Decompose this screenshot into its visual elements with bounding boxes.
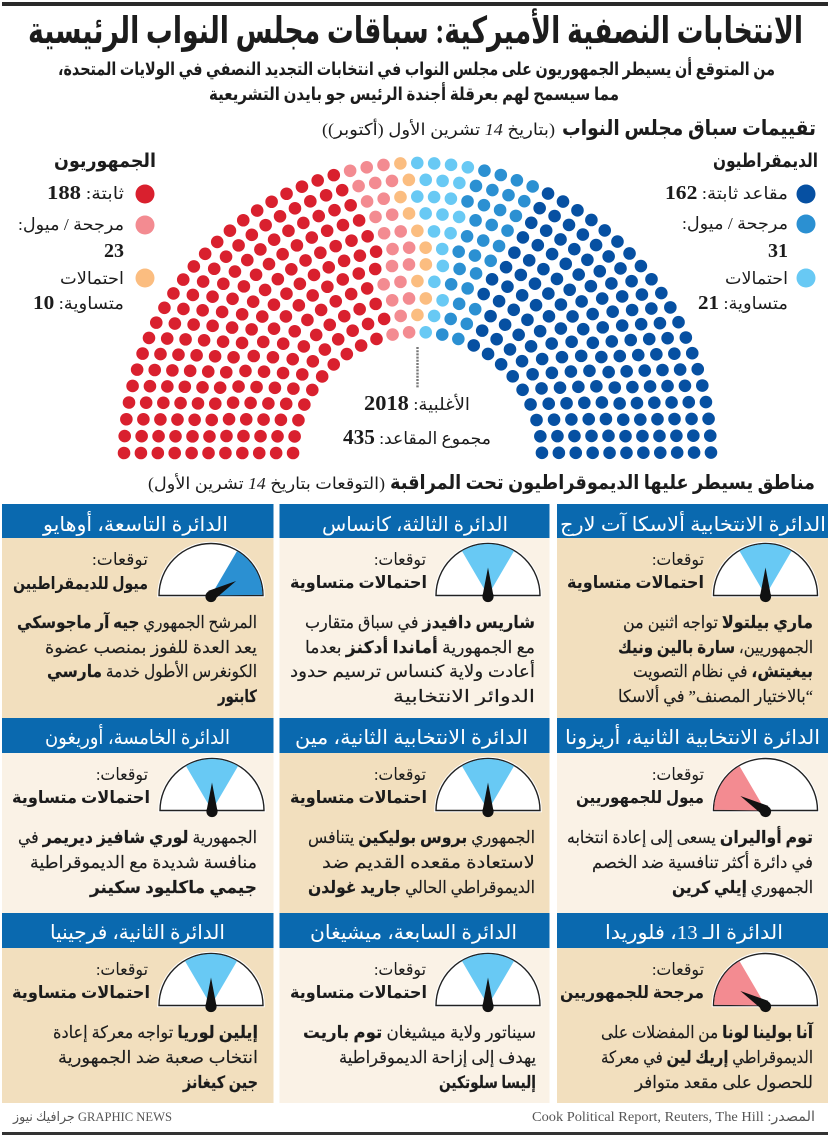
- panel: Oregon: احتمالات متساوية: [12, 788, 150, 808]
- panel: Kansas: احتمالات متساوية: [290, 573, 427, 593]
- heading: House race ratings: [322, 116, 816, 140]
- panel: Alaska: “بالاختيار المصنف” في ألاسكا: [618, 685, 813, 707]
- gauge: even: [714, 544, 818, 602]
- legend: Democrats: مرجحة / ميول:: [682, 214, 788, 233]
- panel: Michigan: الدائرة السابعة، ميشيغان: [310, 922, 517, 944]
- panel: Florida: مرجحة للجمهوريين: [560, 983, 704, 1003]
- panel: Arizona: توم أواليران يسعى إلى إعادة انتخابه: [567, 826, 813, 848]
- panel: Virginia: جين كيغانز: [182, 1073, 258, 1093]
- panel: Michigan: توقعات:: [374, 960, 426, 979]
- panel: Michigan: سيناتور ولاية ميشيغان توم باريت: [303, 1023, 536, 1043]
- panel: Oregon: منافسة شديدة مع الديموقراطية: [30, 853, 257, 873]
- panel: Maine: الديموقراطي الحالي جاريد غولدن: [308, 878, 535, 898]
- footer: credit: GRAPHIC NEWS جرافيك نيوز: [12, 1109, 172, 1125]
- panel: Alaska: ماري بيلتولا تواجه اثنين من: [623, 613, 813, 633]
- legend: Republicans: ثابتة: 188: [47, 182, 124, 204]
- panel: Ohio: توقعات:: [92, 550, 148, 569]
- panel: Virginia: توقعات:: [96, 960, 148, 979]
- footer: source: المصدر: Cook Political Report, Reuters, The Hill: [532, 1110, 815, 1125]
- majority and total seats labels: مجموع المقاعد: 435: [343, 425, 491, 449]
- panel: Oregon: الجمهورية لوري شافيز ديريمر في: [18, 828, 257, 848]
- gauge: even: [159, 954, 263, 1012]
- majority and total seats labels: [343, 391, 491, 449]
- panel: Ohio: الكونغرس الأطول خدمة مارسي: [47, 661, 257, 682]
- panel: Maine: توقعات:: [374, 765, 426, 784]
- panel: Kansas: شاريس دافيدز في سباق متقارب: [305, 613, 535, 633]
- panel: Florida: [557, 913, 828, 1103]
- subtitle: مما سيسمح لهم بعرقلة أجندة الرئيس جو بايدن التشريعية: [209, 82, 619, 105]
- legend: Democrats: احتمالات: [725, 269, 788, 288]
- majority and total seats labels: الأغلبية: 2018: [364, 391, 470, 415]
- gauge: even: [436, 954, 540, 1012]
- panel: Kansas: توقعات:: [374, 550, 426, 569]
- panel: Ohio: كابتور: [217, 687, 257, 707]
- legend: Republicans: احتمالات: [60, 269, 124, 288]
- panel: Arizona: الدائرة الانتخابية الثانية، أريزونا: [565, 724, 820, 749]
- panel: Virginia: الدائرة الثانية، فرجينيا: [50, 922, 225, 944]
- legend: Democrats: متساوية: 21: [698, 292, 788, 314]
- panel: Michigan: احتمالات متساوية: [290, 983, 427, 1003]
- gauge: likely Republican: [714, 954, 818, 1012]
- panel: Kansas: [280, 504, 550, 718]
- panel: Ohio: [2, 504, 274, 718]
- panel: Maine: [280, 718, 550, 913]
- panel: Oregon: الدائرة الخامسة، أوريغون: [45, 724, 230, 749]
- panel: Alaska: الدائرة الانتخابية ألاسكا آت لارج: [560, 511, 826, 536]
- panel: Oregon: جيمي ماكليود سكينر: [89, 878, 257, 898]
- panel: Virginia: انتخاب صعبة ضد الجمهورية: [58, 1048, 258, 1068]
- panel: Virginia: احتمالات متساوية: [12, 983, 150, 1003]
- panel: Florida: للحصول على مقعد متوافر: [634, 1073, 813, 1092]
- panel: Florida: الدائرة الـ 13، فلوريدا: [605, 922, 783, 944]
- panel: Maine: الجمهوري بروس بوليكين يتنافس: [308, 828, 535, 848]
- legend: Democrats: مقاعد ثابتة: 162: [665, 182, 788, 204]
- panel: Michigan: [280, 913, 550, 1103]
- panel: Arizona: ميول للجمهوريين: [576, 788, 704, 808]
- panel: Alaska: توقعات:: [652, 550, 704, 569]
- panel: Michigan: إليسا سلوتكين: [439, 1073, 536, 1093]
- panel: Maine: لاستعادة مقعده القديم ضد: [322, 853, 535, 873]
- panel: Oregon: [2, 718, 274, 913]
- panel: Maine: الدائرة الانتخابية الثانية، مين: [295, 727, 528, 749]
- panel: Alaska: احتمالات متساوية: [567, 573, 704, 593]
- panel: Kansas: الدائرة الثالثة، كانساس: [322, 514, 508, 536]
- panel: Kansas: الدوائر الانتخابية: [393, 687, 535, 706]
- panel: Arizona: [557, 718, 828, 913]
- legend: Republicans: مرجحة / ميول:: [18, 215, 124, 234]
- gauge: even: [436, 758, 540, 817]
- legend: Republicans: 23: [104, 240, 124, 262]
- gauge: even: [436, 544, 540, 602]
- legend: Republicans: الجمهوريون: [54, 151, 156, 172]
- gauge: lean Republican: [714, 758, 818, 817]
- panel: Virginia: [2, 913, 274, 1103]
- panel: Alaska: [557, 504, 828, 718]
- legend: Democrats: 31: [768, 240, 788, 262]
- chart: House seats hemicycle, 435 dots: [124, 163, 711, 453]
- panel: Ohio: المرشح الجمهوري جيه آر ماجوسكي: [17, 611, 257, 633]
- legend: Republicans: [18, 151, 156, 314]
- heading: House race ratings: (بتاريخ 14 تشرين الأول (أكتوبر)): [322, 118, 555, 140]
- panel: Alaska: بيغيتش، في نظام التصويت: [633, 662, 813, 682]
- heading: Democrat-held districts to watch: [148, 472, 815, 494]
- heading: Democrat-held districts to watch: (التوقعات بتاريخ 14 تشرين الأول): [148, 473, 385, 494]
- legend: Democrats: [665, 151, 818, 314]
- panel: Kansas: أعادت ولاية كنساس ترسيم حدود: [290, 660, 535, 682]
- legend: Republicans: متساوية: 10: [33, 292, 124, 314]
- panel: Arizona: في دائرة أكثر تنافسية ضد الخصم: [592, 851, 813, 873]
- panel: Oregon: توقعات:: [96, 765, 148, 784]
- panel: Virginia: إيلين لوريا تواجه معركة إعادة: [53, 1023, 258, 1043]
- panel: Arizona: توقعات:: [652, 765, 704, 784]
- majority marker line: [416, 347, 419, 388]
- gauge: even: [160, 758, 264, 817]
- panel: Florida: الديموقراطي إريك لين في معركة: [601, 1048, 813, 1068]
- panel: Florida: توقعات:: [652, 960, 704, 979]
- panel: Alaska: الجمهوريين، سارة بالين ونيك: [618, 638, 813, 658]
- panel: Ohio: الدائرة التاسعة، أوهايو: [42, 511, 228, 536]
- panel: Arizona: الجمهوري إيلي كرين: [672, 878, 813, 898]
- panel: Ohio: ميول للديمقراطيين: [13, 574, 148, 594]
- gauge: lean Democrat: [159, 544, 263, 602]
- panel: Ohio: يعد العدة للفوز بمنصب عضوة: [45, 638, 257, 657]
- panel: Florida: آنا بولينا لونا من المفضلات على: [601, 1021, 814, 1043]
- subtitle: [58, 57, 775, 105]
- panel: Maine: احتمالات متساوية: [290, 788, 427, 808]
- panel: Michigan: يهدف إلى إزاحة الديموقراطية: [339, 1048, 536, 1068]
- panel: Kansas: مع الجمهورية أماندا أدكنز بعدما: [305, 636, 535, 658]
